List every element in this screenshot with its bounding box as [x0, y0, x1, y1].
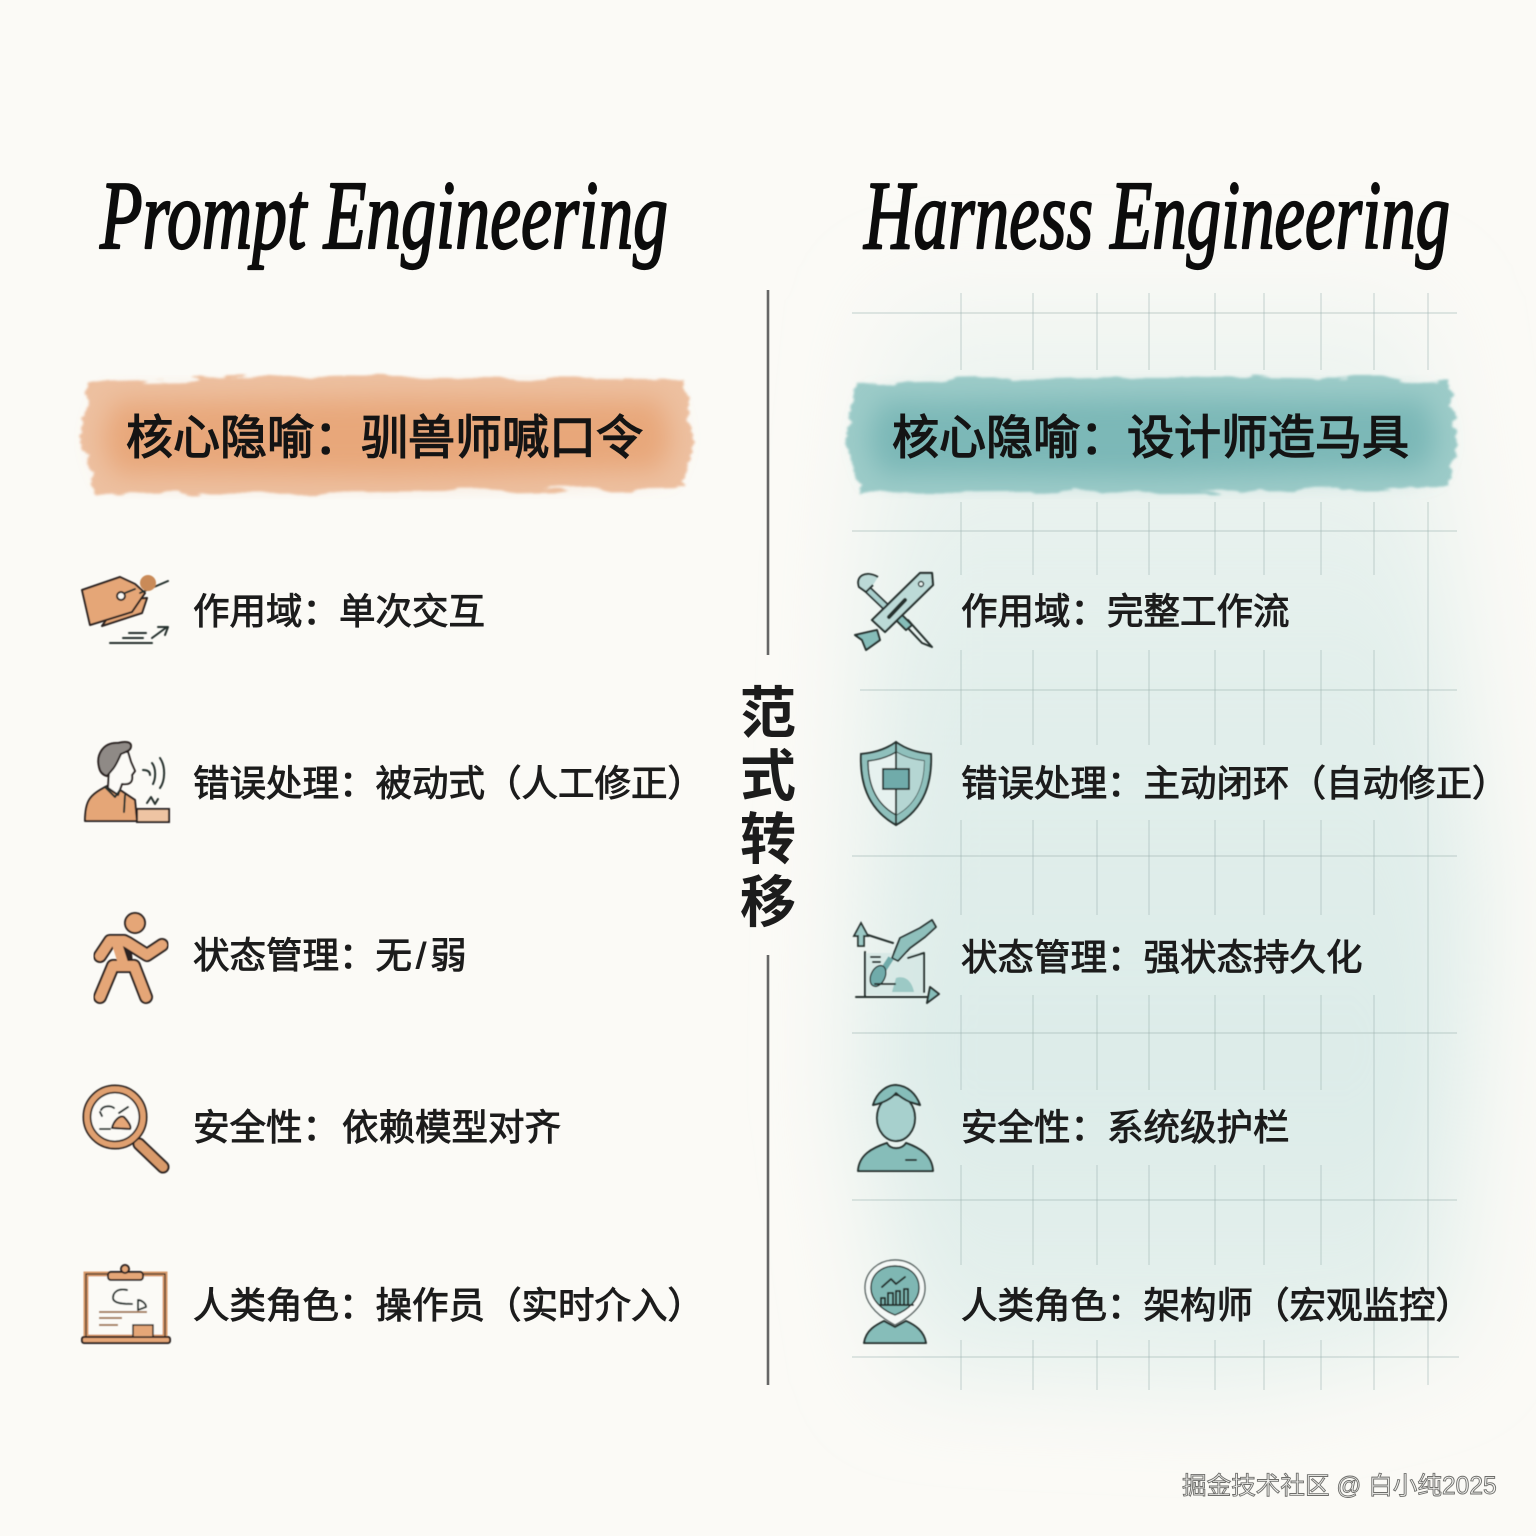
row text: human role: 人类角色：架构师（宏观监控） [961, 1285, 1472, 1326]
icon: person bust [858, 1085, 933, 1171]
row text: error handling: 错误处理：主动闭环（自动修正） [961, 763, 1508, 804]
row text: safety: 安全性：依赖模型对齐 [193, 1107, 561, 1148]
panel: left metaphor banner [82, 376, 692, 494]
banner text: left: 核心隐喻：驯兽师喊口令 [126, 411, 643, 464]
brush core: orange [102, 398, 672, 476]
brush core: teal [868, 398, 1437, 476]
center label: paradigm shift: 范 [740, 682, 796, 745]
icon: magnifying glass [87, 1089, 163, 1167]
brush stroke: orange [82, 376, 692, 494]
icon: location pin with chart over bust [864, 1260, 926, 1343]
row text: state management: 状态管理：强状态持久化 [961, 937, 1362, 978]
center divider: lower [767, 955, 769, 1385]
panel: left comparison rows [193, 591, 704, 1326]
icon: crossed wrench and tool [855, 573, 933, 650]
row text: scope: 作用域：单次交互 [193, 591, 485, 632]
watermark: 掘金技术社区 @ 白小纯2025 [1182, 1472, 1497, 1500]
center label: paradigm shift: 转 [740, 808, 796, 871]
icon: person shouting [85, 742, 169, 822]
center label: paradigm shift: 式 [740, 745, 796, 808]
row text: state management: 状态管理：无/弱 [193, 935, 467, 976]
center label: paradigm shift: 移 [740, 871, 796, 934]
icon: clipboard board [82, 1265, 170, 1343]
panel: harness blueprint wash [860, 300, 1480, 1390]
icon: shield [861, 742, 931, 825]
icon: price tag with speed lines [82, 575, 168, 643]
icon: walking figure [100, 913, 162, 997]
icon: chart with robot arm [854, 920, 939, 1003]
row text: scope: 作用域：完整工作流 [961, 591, 1290, 632]
blueprint grid [852, 293, 1459, 1390]
center divider: upper [767, 290, 769, 655]
center label: paradigm shift [740, 682, 796, 934]
row text: human role: 人类角色：操作员（实时介入） [193, 1285, 704, 1326]
brush stroke: teal [846, 376, 1458, 494]
banner text: right: 核心隐喻：设计师造马具 [892, 411, 1409, 464]
panel: right comparison rows [961, 591, 1508, 1326]
row text: error handling: 错误处理：被动式（人工修正） [193, 763, 704, 804]
panel: right metaphor banner [846, 376, 1458, 494]
title: Prompt Engineering: Prompt Engineering [99, 162, 668, 270]
row text: safety: 安全性：系统级护栏 [961, 1107, 1290, 1148]
